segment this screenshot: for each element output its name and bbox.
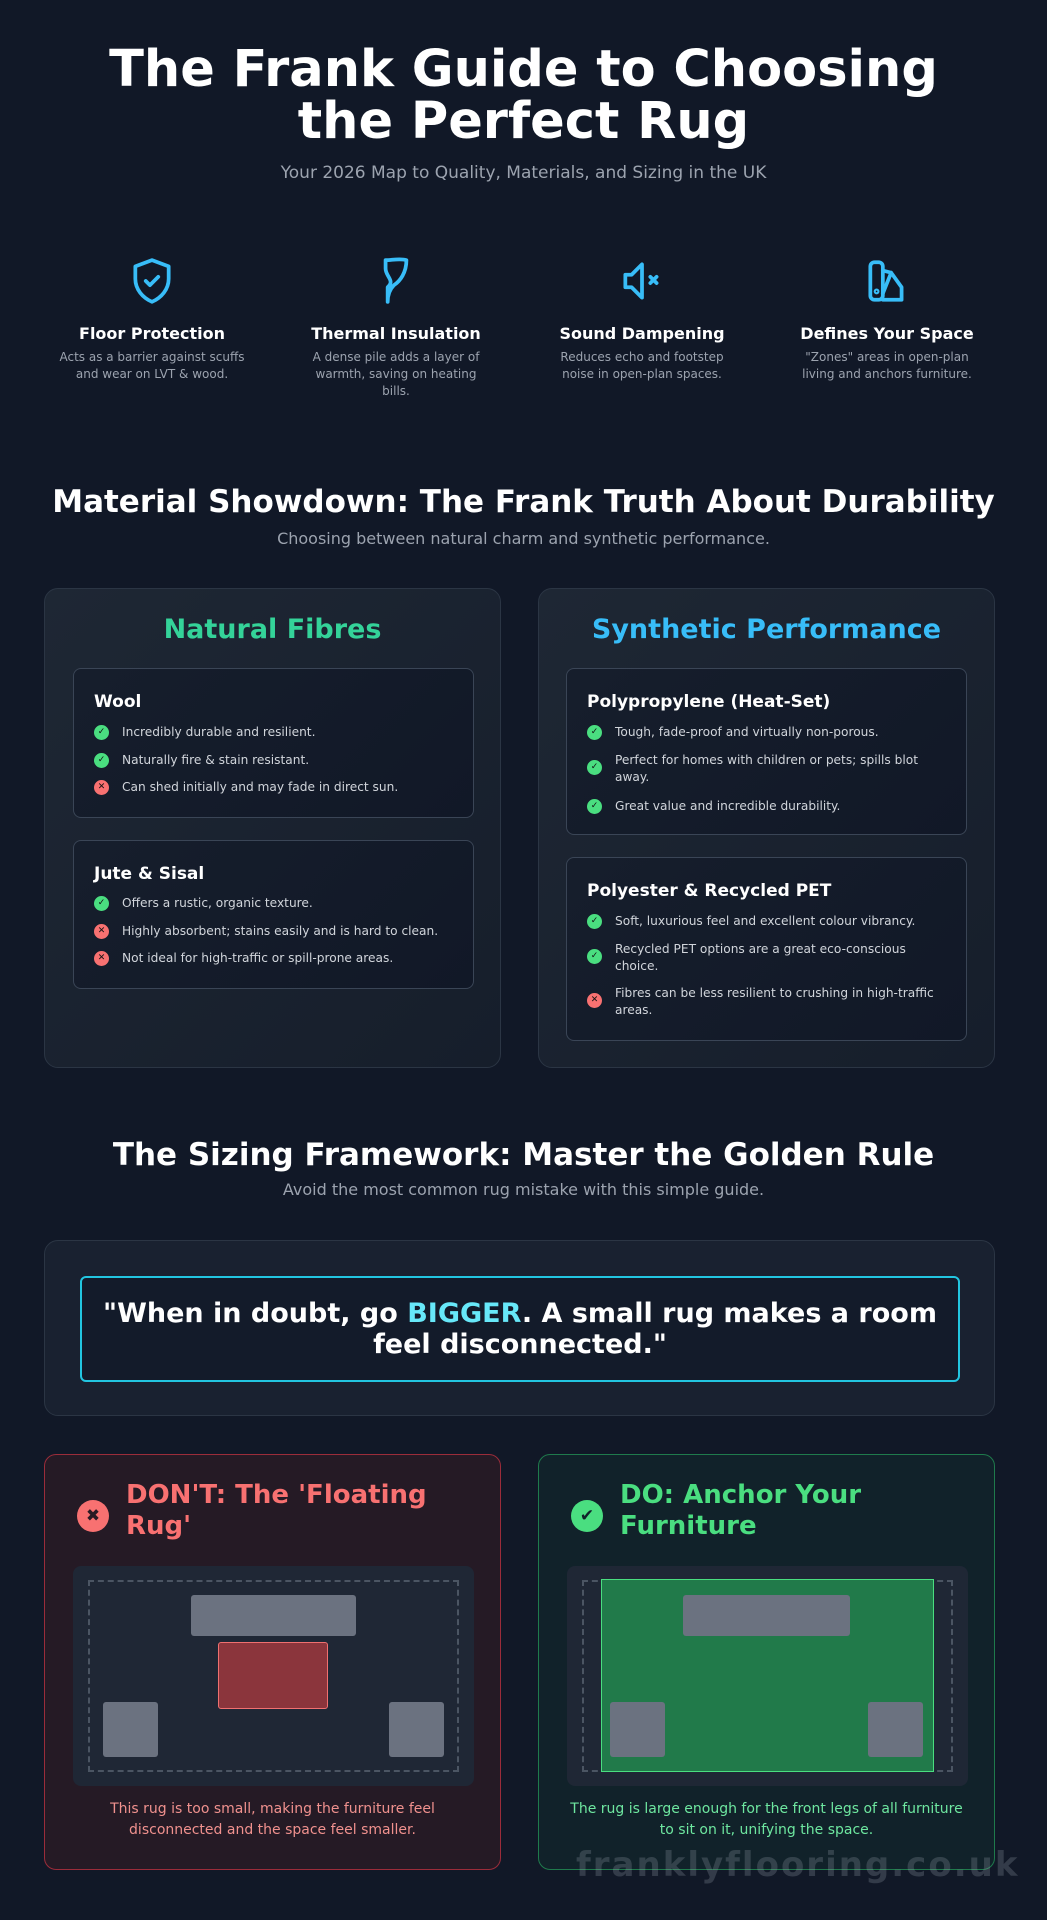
rug large — [601, 1579, 934, 1772]
feature: sound: Reduces echo and footstep — [560, 350, 724, 364]
feature: space: living and anchors furniture. — [802, 367, 972, 381]
caption: to sit on it, unifying the space. — [660, 1822, 873, 1838]
subtitle: Your 2026 Map to Quality, Materials, and Sizing in the UK — [281, 163, 766, 183]
feature: sound — [559, 262, 725, 381]
card: polyester: Polyester & Recycled PET — [587, 881, 831, 901]
feature: thermal: warmth, saving on heating — [316, 367, 476, 381]
diagram — [73, 1566, 474, 1786]
quote box: feel disconnected." — [373, 1329, 667, 1360]
card: polyester: Recycled PET options are a great eco-conscious choice. — [615, 942, 906, 973]
heading: sizing: The Sizing Framework: Master the Golden Rule — [113, 1137, 934, 1173]
title: the Perfect Rug — [298, 92, 749, 151]
card: polyester: ✓ — [591, 916, 598, 926]
watermark: franklyflooring.co.uk — [576, 1845, 1019, 1885]
quote box: "When in doubt, go BIGGER. A small rug makes a room — [103, 1298, 937, 1329]
sofa — [191, 1595, 356, 1636]
caption — [110, 1801, 435, 1838]
diagram — [567, 1566, 968, 1786]
card: jute: ✕ — [98, 953, 105, 963]
card: jute: Jute & Sisal — [94, 864, 204, 884]
card: wool — [73, 668, 474, 818]
feature: floor protection — [59, 258, 245, 381]
card: polyester: ✓ — [591, 951, 598, 961]
panel: don't — [44, 1454, 501, 1870]
chairs — [103, 1702, 158, 1757]
card: wool: Incredibly durable and resilient. — [122, 725, 315, 739]
card: jute: Offers a rustic, organic texture. — [122, 896, 313, 910]
card: polypropylene — [566, 668, 967, 835]
quote panel — [44, 1240, 995, 1416]
caption: The rug is large enough for the front legs of all furniture — [570, 1801, 963, 1817]
quote box — [80, 1276, 960, 1382]
card: wool: Naturally fire & stain resistant. — [122, 753, 309, 767]
icon: swatch — [868, 260, 904, 302]
title: The Frank Guide to Choosing — [109, 40, 938, 99]
chairs — [610, 1702, 665, 1757]
sofa — [683, 1595, 850, 1636]
card: polypropylene: Tough, fade-proof and virtually non-porous. — [615, 725, 879, 739]
subheading: Avoid the most common rug mistake with this simple guide. — [283, 1180, 764, 1199]
title: Furniture — [620, 1511, 757, 1541]
feature: sound: noise in open-plan spaces. — [562, 367, 722, 381]
card: polypropylene: ✓ — [591, 801, 598, 811]
title — [109, 40, 938, 151]
feature: floor protection: Acts as a barrier against scuffs — [59, 350, 245, 364]
card: wool: Can shed initially and may fade in direct sun. — [122, 780, 398, 794]
card: wool: ✓ — [98, 755, 105, 765]
icon: check — [571, 1500, 603, 1532]
icon: cross: ✖ — [86, 1506, 100, 1526]
feature: floor protection: Floor Protection — [79, 324, 225, 343]
card: wool: ✕ — [98, 782, 105, 792]
rug small — [218, 1642, 328, 1709]
panel title: Synthetic Performance — [592, 614, 941, 645]
title: Rug' — [126, 1511, 191, 1541]
title: DON'T: The 'Floating — [126, 1480, 427, 1510]
card: jute: ✓ — [98, 898, 105, 908]
feature: sound: Sound Dampening — [559, 324, 725, 343]
feature: thermal: bills. — [382, 384, 410, 398]
icon: cross — [77, 1500, 109, 1532]
title — [126, 1480, 427, 1541]
icon: thermal — [384, 258, 408, 304]
caption — [570, 1801, 963, 1838]
card: jute — [73, 840, 474, 989]
panel: natural fibres — [44, 588, 501, 1068]
feature: space — [800, 260, 974, 381]
card: wool: ✓ — [98, 727, 105, 737]
feature: floor protection: and wear on LVT & wood. — [76, 367, 228, 381]
card: polyester: ✕ — [591, 995, 598, 1005]
title: DO: Anchor Your — [620, 1480, 861, 1510]
panel: do — [538, 1454, 995, 1870]
title — [620, 1480, 861, 1541]
card: jute: ✕ — [98, 926, 105, 936]
card: polypropylene: Polypropylene (Heat-Set) — [587, 692, 830, 712]
card: polypropylene: Perfect for homes with children or pets; spills blot away. — [615, 753, 918, 784]
card: jute: Not ideal for high-traffic or spill-prone areas. — [122, 951, 393, 965]
caption: This rug is too small, making the furniture feel — [110, 1801, 435, 1817]
card: polyester: Soft, luxurious feel and excellent colour vibrancy. — [615, 914, 915, 928]
card: wool: Wool — [94, 692, 141, 712]
card: polyester — [566, 857, 967, 1041]
icon: check: ✔ — [580, 1506, 594, 1526]
card: polypropylene: ✓ — [591, 727, 598, 737]
subheading: Choosing between natural charm and synthetic performance. — [277, 529, 770, 548]
feature: thermal — [311, 258, 481, 398]
card: jute: Highly absorbent; stains easily and is hard to clean. — [122, 924, 438, 938]
feature: space: Defines Your Space — [800, 324, 974, 343]
card: polypropylene: ✓ — [591, 762, 598, 772]
icon: mute — [623, 262, 659, 300]
panel: synthetic — [538, 588, 995, 1068]
feature: space: "Zones" areas in open-plan — [805, 350, 969, 364]
feature: thermal: A dense pile adds a layer of — [313, 350, 479, 364]
icon: shield — [133, 258, 171, 304]
card: polyester: Fibres can be less resilient to crushing in high-traffic areas. — [615, 986, 934, 1017]
heading: material showdown: Material Showdown: The Frank Truth About Durability — [52, 484, 995, 520]
card: polypropylene: Great value and incredible durability. — [615, 799, 840, 813]
panel title: Natural Fibres — [164, 614, 381, 645]
feature: thermal: Thermal Insulation — [311, 324, 481, 343]
caption: disconnected and the space feel smaller. — [129, 1822, 416, 1838]
